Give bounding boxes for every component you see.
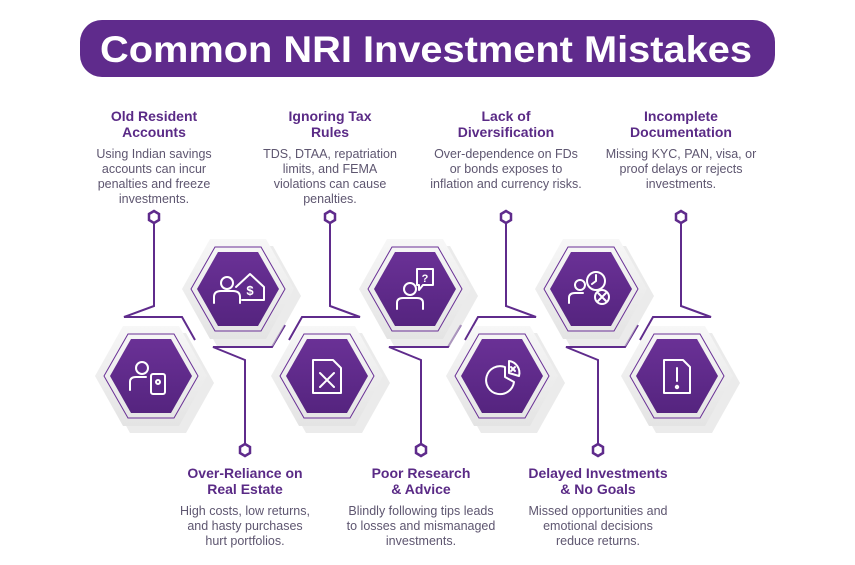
text: Ignoring Tax Rules: limits, and FEMA	[283, 162, 378, 176]
text: Ignoring Tax Rules: Rules	[311, 124, 349, 140]
text: Incomplete Documentation: investments.	[646, 177, 716, 191]
text: Lack of Diversification	[430, 108, 582, 191]
icon: person with house dollar: $	[246, 283, 254, 298]
text: Ignoring Tax Rules: TDS, DTAA, repatriation	[263, 147, 397, 161]
text: Lack of Diversification: Over-dependence on FDs	[434, 147, 578, 161]
hexagon bottom 1	[95, 326, 214, 433]
text: Lack of Diversification: Lack of	[481, 108, 531, 124]
text: Ignoring Tax Rules: penalties.	[303, 192, 357, 206]
title: Common NRI Investment Mistakes	[100, 29, 752, 70]
hexagon bottom 4	[621, 326, 740, 433]
text: Old Resident Accounts: Accounts	[122, 124, 186, 140]
text: Delayed Investments & No Goals: reduce returns.	[556, 534, 640, 548]
text: Lack of Diversification: Diversification	[458, 124, 554, 140]
text: Ignoring Tax Rules	[263, 108, 397, 206]
text: Incomplete Documentation: Incomplete	[644, 108, 718, 124]
icon: pie chart cross	[486, 361, 519, 394]
title	[80, 20, 775, 77]
hexagon top 2	[359, 239, 478, 346]
text: Over-Reliance on Real Estate: hurt portfolios.	[205, 534, 285, 548]
text: Ignoring Tax Rules: violations can cause	[274, 177, 386, 191]
text: Poor Research & Advice	[347, 465, 495, 548]
icon: person clock cancel	[569, 272, 609, 304]
text: Poor Research & Advice: investments.	[386, 534, 456, 548]
icon: person question: ?	[422, 273, 429, 285]
text: Old Resident Accounts: penalties and freeze	[98, 177, 210, 191]
text: Over-Reliance on Real Estate: Real Estate	[207, 481, 283, 497]
text: Lack of Diversification: inflation and currency risks.	[430, 177, 582, 191]
icon: person with id	[130, 362, 165, 394]
connectors top	[124, 221, 711, 340]
text: Incomplete Documentation: proof delays or rejects	[620, 162, 742, 176]
text: Old Resident Accounts	[96, 108, 212, 206]
dots	[149, 211, 686, 456]
hexagon top 1	[182, 239, 301, 346]
text: Incomplete Documentation: Documentation	[630, 124, 732, 140]
text: Old Resident Accounts: Using Indian savings	[96, 147, 212, 161]
text: Delayed Investments & No Goals	[528, 465, 668, 548]
icon: document alert	[664, 360, 690, 393]
hexagon top 3	[535, 239, 654, 346]
text: Lack of Diversification: or bonds exposes to	[450, 162, 562, 176]
text: Ignoring Tax Rules: Ignoring Tax	[289, 108, 372, 124]
connectors bottom	[213, 325, 638, 446]
text: Poor Research & Advice: Poor Research	[372, 465, 470, 481]
text: Old Resident Accounts: accounts can incur	[102, 162, 206, 176]
text: Delayed Investments & No Goals: & No Goals	[560, 481, 636, 497]
text: Over-Reliance on Real Estate: High costs, low returns,	[180, 504, 310, 518]
text: Poor Research & Advice: Blindly following tips leads	[348, 504, 494, 518]
text: Delayed Investments & No Goals: emotional decisions	[543, 519, 653, 533]
text: Delayed Investments & No Goals: Missed opportunities and	[529, 504, 668, 518]
text: Poor Research & Advice: & Advice	[391, 481, 451, 497]
text: Old Resident Accounts: Old Resident	[111, 108, 198, 124]
text: Poor Research & Advice: to losses and mismanaged	[347, 519, 495, 533]
text: Incomplete Documentation	[606, 108, 756, 191]
text: Over-Reliance on Real Estate	[180, 465, 310, 548]
hexagon bottom 3	[446, 326, 565, 433]
text: Over-Reliance on Real Estate: Over-Reliance on	[187, 465, 303, 481]
text: Old Resident Accounts: investments.	[119, 192, 189, 206]
text: Delayed Investments & No Goals: Delayed Investments	[528, 465, 668, 481]
hexagon bottom 2	[271, 326, 390, 433]
icon: document cross	[313, 360, 341, 393]
text: Incomplete Documentation: Missing KYC, PAN, visa, or	[606, 147, 756, 161]
text: Over-Reliance on Real Estate: and hasty purchases	[187, 519, 303, 533]
